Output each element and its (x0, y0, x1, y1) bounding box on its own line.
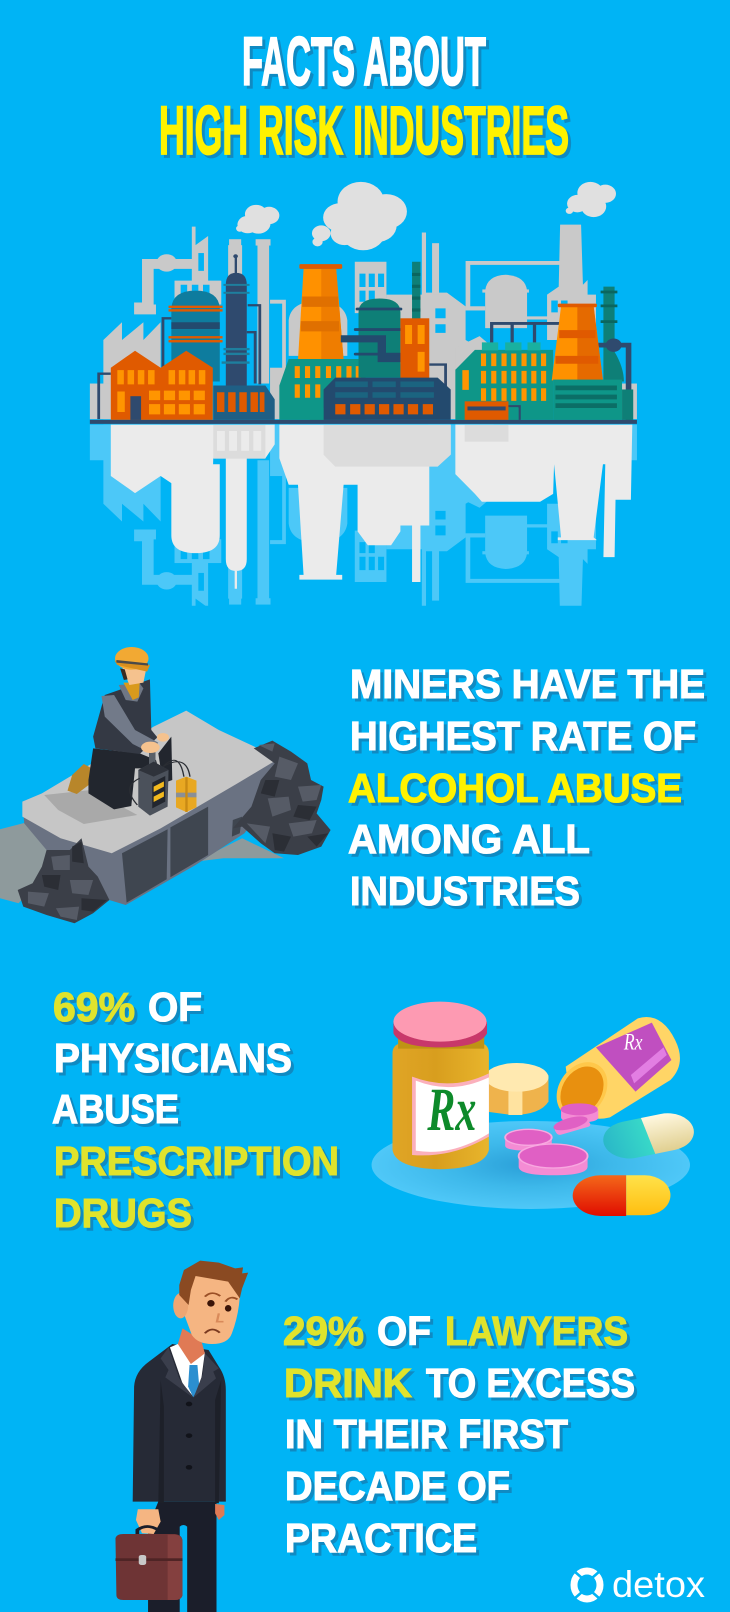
plant 2: orange block (400, 318, 446, 388)
plant 2: teal tank (341, 299, 405, 378)
ground shadow (0, 823, 284, 903)
illustration: pill bottles (372, 1002, 700, 1216)
briefcase handle (137, 1526, 163, 1536)
word: drink: DRINK (284, 1360, 412, 1406)
main bottle cap (393, 1002, 487, 1047)
plant 2: teal spire (412, 262, 420, 321)
arm (102, 695, 158, 753)
line: highest rate of: HIGHEST RATE OF (350, 713, 696, 759)
tipped bottle label Rx: Rx (623, 1030, 643, 1055)
main bottle label: Rx (427, 1076, 476, 1144)
plant 1: navy column (99, 254, 260, 419)
face (183, 1272, 240, 1344)
illustration: factory skyline with reflection (90, 182, 637, 619)
words: to excess: TO EXCESS (426, 1360, 635, 1406)
miner (68, 647, 196, 816)
back leg (158, 737, 172, 783)
reflection: foreground plants (111, 425, 632, 589)
detonator box (138, 762, 169, 816)
face (122, 667, 147, 685)
red and yellow capsule (573, 1175, 670, 1216)
plant 1: low teal building (213, 386, 275, 420)
coal pile left (18, 838, 109, 923)
collar and scarf (119, 683, 143, 702)
ear (173, 1293, 188, 1318)
plant 1: orange brick factory (111, 351, 213, 420)
text: miners fact (348, 661, 705, 914)
text: lawyers fact (283, 1308, 635, 1561)
word: lawyers: LAWYERS (445, 1308, 628, 1354)
cloud left (236, 205, 279, 234)
line: among all: AMONG ALL (348, 816, 590, 862)
ground line (90, 420, 637, 424)
tipped bottle (549, 1017, 680, 1122)
pink pills (505, 1103, 598, 1175)
plant 3: teal building (455, 342, 553, 420)
right hand (215, 1504, 224, 1520)
main bottle label (412, 1073, 489, 1155)
line: drugs: DRUGS (54, 1190, 192, 1236)
briefcase (115, 1534, 183, 1600)
wires (130, 760, 190, 805)
trousers (88, 748, 158, 809)
jacket (133, 1344, 226, 1502)
left hand (136, 1509, 161, 1534)
coal pile right (233, 741, 331, 855)
rock face (22, 758, 279, 905)
plant 3: small orange shed (465, 401, 520, 420)
cloud right (566, 182, 616, 217)
line: in their first: IN THEIR FIRST (285, 1411, 568, 1457)
stat: 29%: 29% (283, 1308, 364, 1354)
title (159, 23, 569, 169)
open bottle lid (485, 1063, 548, 1115)
hair (179, 1261, 248, 1305)
reflection: central and small building tint (213, 425, 508, 467)
lapels (161, 1347, 219, 1397)
tie (188, 1365, 199, 1397)
plant 3: pipes (492, 323, 562, 348)
line: physicians: PHYSICIANS (54, 1035, 292, 1081)
hands and plunger (141, 733, 169, 767)
jacket shading (158, 1380, 221, 1503)
helmet (115, 647, 150, 672)
shirt (170, 1344, 205, 1397)
trousers (148, 1502, 217, 1612)
reflection: background plants (90, 425, 637, 619)
line: abuse: ABUSE (52, 1086, 179, 1132)
illustration: miner on rock (0, 647, 331, 923)
logo: detox (574, 1564, 706, 1605)
plant 2: navy central building (310, 378, 451, 420)
rock top (22, 711, 279, 853)
background grey plants (90, 225, 637, 419)
main bottle (393, 1002, 489, 1169)
plant 3: lower teal block (553, 380, 633, 420)
line: alcohol abuse: ALCOHOL ABUSE (348, 765, 682, 811)
line: miners have the: MINERS HAVE THE (350, 661, 705, 707)
wordmark: detox (612, 1564, 706, 1605)
plant 2: orange cooling tower (298, 264, 344, 360)
neck (178, 1328, 205, 1364)
plant 3: teal spire (596, 287, 629, 420)
icon: lifebuoy (574, 1571, 600, 1599)
title line 1: FACTS ABOUT (242, 23, 486, 100)
rock darker strips (122, 807, 242, 903)
nose and mouth (217, 1313, 223, 1322)
illustration: lawyer with briefcase (115, 1261, 248, 1612)
vest (93, 679, 157, 754)
boot (68, 764, 98, 794)
stat: 69%: 69% (53, 984, 135, 1030)
rock shadow (44, 790, 137, 824)
surface shadow (372, 1121, 690, 1209)
teal and cream capsule (597, 1109, 700, 1163)
eyebrows and eyes (205, 1293, 237, 1312)
plant 3: orange cooling tower (552, 304, 603, 380)
line: prescription: PRESCRIPTION (54, 1138, 339, 1184)
text: physicians fact (52, 984, 339, 1236)
line: decade of: DECADE OF (285, 1463, 510, 1509)
cloud centre (312, 182, 407, 250)
dynamite (176, 777, 196, 812)
plant 1: teal tank (169, 291, 223, 382)
word: of: OF (148, 984, 202, 1030)
word: of: OF (377, 1308, 431, 1354)
buttons (186, 1402, 192, 1470)
line: industries: INDUSTRIES (350, 868, 580, 914)
line: practice: PRACTICE (285, 1515, 477, 1561)
plant 2: teal building (279, 359, 365, 420)
